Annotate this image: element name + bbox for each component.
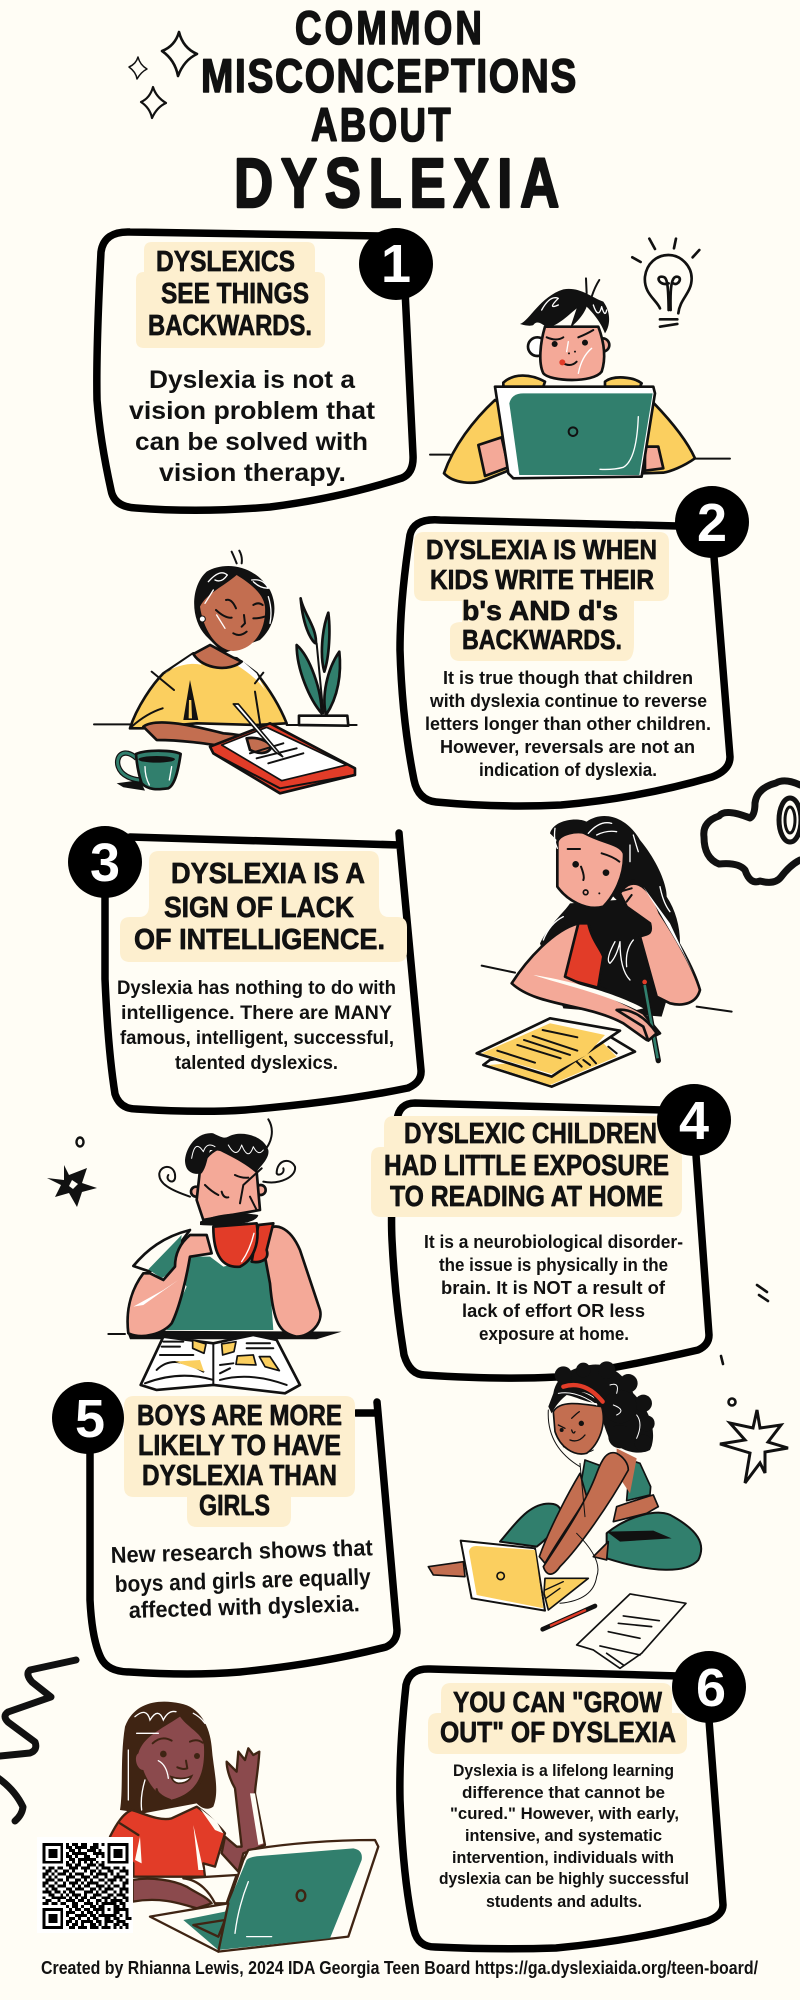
panel 5 heading: DYSLEXIA THAN	[142, 1460, 337, 1492]
panel 2 body text	[425, 668, 711, 780]
panel 3 body text: intelligence. There are MANY	[121, 1003, 392, 1024]
illustration: girl writing on tablet	[94, 551, 357, 793]
panel 5 number badge: 5	[75, 1389, 105, 1449]
illustration: curly-haired girl with laptop	[428, 1361, 701, 1668]
panel 5 heading: LIKELY TO HAVE	[138, 1430, 341, 1462]
panel 5 number badge	[52, 1382, 124, 1454]
panel 3 body text	[117, 978, 396, 1074]
panel 5 body text	[110, 1534, 373, 1623]
QR code	[37, 1837, 133, 1933]
panel 1 heading: SEE THINGS	[161, 278, 309, 310]
panel 1 heading: BACKWARDS.	[148, 310, 312, 342]
panel 4 number badge: 4	[679, 1091, 709, 1151]
illustration: boy at laptop	[430, 278, 730, 483]
panel 5 heading: BOYS ARE MORE	[137, 1400, 342, 1432]
title: MISCONCEPTIONS	[201, 49, 578, 102]
panel 1 body text	[129, 366, 376, 487]
panel 3 number badge: 3	[90, 833, 120, 893]
panel 6 number badge: 6	[696, 1658, 726, 1718]
panel 1 outline	[97, 232, 413, 510]
panel 6 body text: "cured." However, with early,	[450, 1804, 679, 1823]
panel 1 heading	[136, 242, 325, 348]
panel 2 body text: indication of dyslexia.	[479, 760, 657, 780]
panel 4 heading: HAD LITTLE EXPOSURE	[384, 1150, 669, 1182]
panel 4 heading	[371, 1116, 682, 1217]
panel 2 outline	[400, 520, 730, 806]
panel 2 heading: DYSLEXIA IS WHEN	[426, 534, 657, 565]
panel 2 heading: BACKWARDS.	[462, 624, 622, 655]
panel 3 body text: famous, intelligent, successful,	[120, 1028, 394, 1049]
panel 4 body text: the issue is physically in the	[439, 1255, 668, 1275]
icon: lightbulb	[632, 239, 699, 327]
panel 1 number badge	[359, 228, 433, 300]
illustration: girl waving at laptop	[110, 1702, 378, 1952]
panel 5 heading: GIRLS	[199, 1490, 270, 1522]
panel 1 body text: can be solved with	[135, 428, 368, 456]
panel 2 number badge	[675, 486, 749, 558]
panel 6 body text	[439, 1761, 689, 1911]
panel 6 body text: difference that cannot be	[462, 1783, 665, 1802]
panel 4 body text	[424, 1232, 683, 1344]
panel 4 body text: exposure at home.	[479, 1324, 629, 1344]
panel 6 heading: YOU CAN "GROW	[453, 1687, 663, 1719]
title: ABOUT	[311, 98, 453, 151]
panel 1 body text: Dyslexia is not a	[149, 366, 356, 394]
panel 1 number badge: 1	[381, 234, 411, 294]
panel 6 number badge	[672, 1651, 746, 1723]
panel 6 heading	[428, 1683, 687, 1754]
panel 4 heading: DYSLEXIC CHILDREN	[404, 1118, 657, 1150]
panel 4 body text: lack of effort OR less	[462, 1301, 645, 1321]
panel 5 heading	[124, 1396, 355, 1527]
panel 3 heading: SIGN OF LACK	[164, 892, 354, 924]
panel 3 body text: talented dyslexics.	[175, 1053, 338, 1074]
panel 4 number badge	[657, 1084, 731, 1156]
panel 5 body text: boys and girls are equally	[114, 1563, 371, 1597]
panel 2 body text: However, reversals are not an	[440, 737, 695, 757]
panel 2 body text: with dyslexia continue to reverse	[429, 691, 707, 711]
panel 6 body text: students and adults.	[486, 1892, 642, 1911]
panel 1 heading: DYSLEXICS	[156, 246, 295, 278]
panel 3 body text: Dyslexia has nothing to do with	[117, 978, 396, 999]
illustration: man drinking coffee over book	[108, 1119, 342, 1393]
panel 3 heading: OF INTELLIGENCE.	[134, 924, 385, 956]
decoration: scribble cloud	[704, 781, 800, 882]
panel 4 body text: It is a neurobiological disorder-	[424, 1232, 683, 1252]
panel 4 outline	[392, 1103, 709, 1378]
panel 1 body text: vision problem that	[129, 397, 376, 425]
panel 2 body text: It is true though that children	[443, 668, 693, 688]
panel 3 heading	[120, 851, 407, 962]
panel 6 body text: dyslexia can be highly successful	[439, 1869, 689, 1888]
panel 3 heading: DYSLEXIA IS A	[171, 858, 365, 890]
panel 5 outline	[90, 1402, 397, 1674]
panel 1 body text: vision therapy.	[159, 459, 346, 487]
title: DYSLEXIA	[234, 144, 567, 222]
panel 2 heading: KIDS WRITE THEIR	[430, 564, 654, 595]
panel 2 number badge: 2	[697, 493, 727, 553]
panel 2 body text: letters longer than other children.	[425, 714, 711, 734]
panel 6 outline	[400, 1669, 723, 1949]
panel 6 body text: Dyslexia is a lifelong learning	[453, 1761, 674, 1780]
panel 3 number badge	[68, 826, 142, 898]
decoration: left spiky star	[47, 1138, 97, 1207]
decoration: right spiky star	[720, 1285, 788, 1483]
panel 4 body text: brain. It is NOT a result of	[441, 1278, 666, 1298]
panel 6 heading: OUT" OF DYSLEXIA	[440, 1717, 676, 1749]
title	[201, 1, 578, 222]
panel 2 heading: b's AND d's	[462, 595, 618, 626]
panel 6 body text: intensive, and systematic	[465, 1826, 662, 1845]
title: COMMON	[295, 1, 485, 54]
panel 6 body text: intervention, individuals with	[452, 1848, 674, 1867]
illustration: long-haired girl with papers	[477, 816, 732, 1087]
panel 5 body text: affected with dyslexia.	[128, 1590, 360, 1623]
panel 5 body text: New research shows that	[110, 1534, 373, 1568]
decoration: squiggle	[0, 1660, 76, 1821]
panel 4 heading: TO READING AT HOME	[390, 1181, 663, 1213]
panel 2 heading	[414, 532, 669, 661]
panel 3 outline	[105, 833, 421, 1111]
icon: sparkles	[129, 32, 197, 118]
